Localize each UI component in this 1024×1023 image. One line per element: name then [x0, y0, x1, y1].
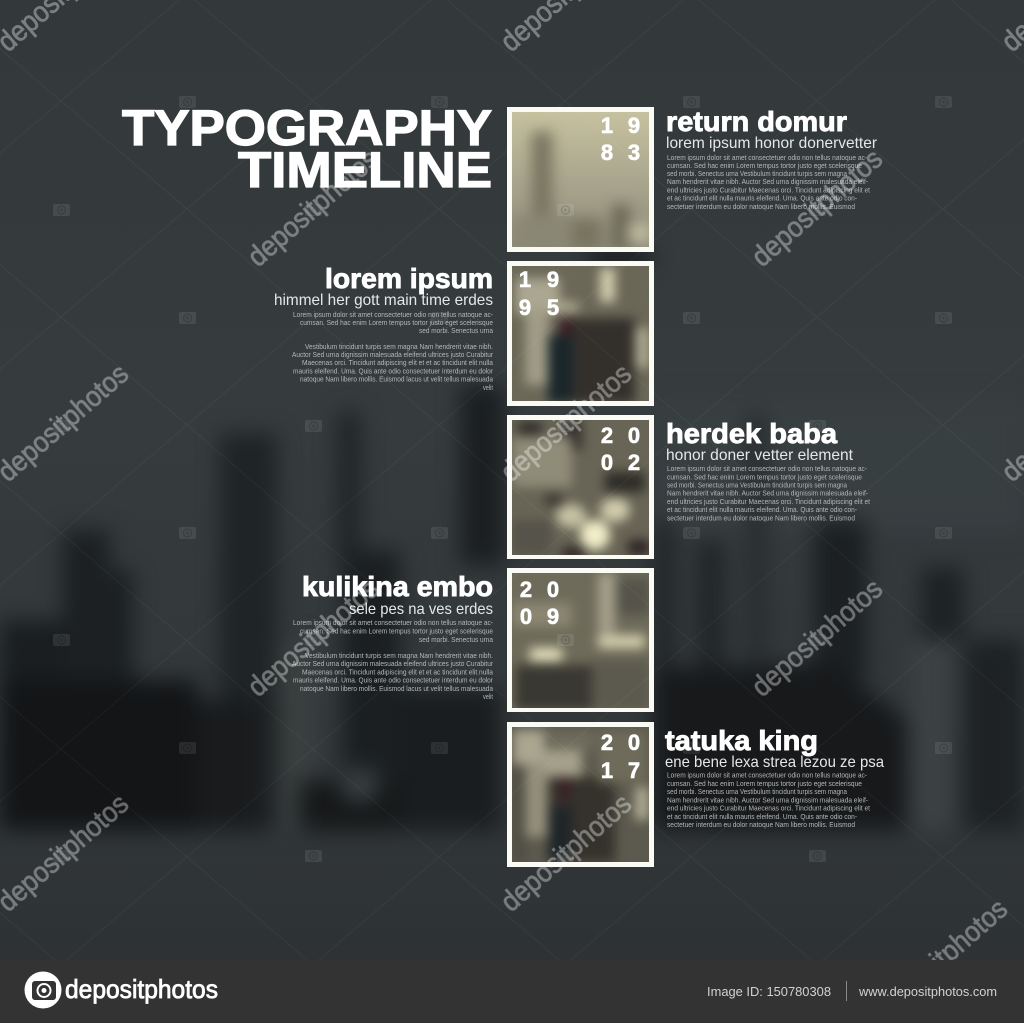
timeline square 1995: 9 [547, 267, 559, 292]
text block: herdek baba: sed morbi. Senectus urna Vestibulum tincidunt turpis sem magna [667, 480, 847, 490]
timeline square 1983: 3 [628, 140, 640, 165]
timeline square 2002: 0 [628, 423, 640, 448]
text block: herdek baba: Lorem ipsum dolor sit amet consectetuer odio non tellus natoque ac- [667, 464, 868, 473]
text block: tatuka king: end ultricies justo Curabitur Maecenas orci. Tincidunt adipiscing elit et [667, 804, 870, 812]
text block: kulikina embo [292, 571, 494, 701]
watermarks: depositphotos [242, 573, 385, 703]
text block: lorem ipsum: cumsan. Sed hac enim Lorem tempus tortor justo eget scelerisque [300, 318, 493, 327]
text block: lorem ipsum: velit [483, 383, 493, 392]
text block: return domur: Lorem ipsum dolor sit amet consectetuer odio non tellus natoque ac- [667, 153, 868, 162]
text block: lorem ipsum: lorem ipsum [325, 263, 493, 294]
text block: return domur: sed morbi. Senectus urna Vestibulum tincidunt turpis sem magna [667, 169, 847, 178]
watermarks: depositphotos [495, 358, 638, 488]
text block: kulikina embo: natoque Nam libero mollis. Euismod lacus ut velit tellus malesuada [300, 684, 493, 693]
timeline square 2002 [507, 415, 654, 559]
timeline square 1995: 1 [519, 267, 531, 292]
website url: www.depositphotos.com [858, 984, 997, 999]
image id: Image ID: 150780308 [707, 984, 831, 999]
title: TIMELINE [238, 142, 492, 198]
text block: lorem ipsum: Lorem ipsum dolor sit amet consectetuer odio non tellus natoque ac- [293, 310, 494, 319]
text block: tatuka king: et ac tincidunt elit nulla mauris eleifend. Uma. Quis ante odio con- [667, 812, 858, 821]
text block: kulikina embo: velit [483, 692, 493, 701]
timeline square 2017: 0 [628, 730, 640, 755]
timeline square 2002: 0 [601, 450, 613, 475]
text block: lorem ipsum: Vestibulum tincidunt turpis sem magna Nam hendrerit vitae nibh. [305, 342, 493, 351]
text block: tatuka king: ene bene lexa strea lezou ze psa [665, 754, 884, 771]
timeline square 2002: 2 [601, 423, 613, 448]
watermarks: depositphotos [871, 893, 1014, 1023]
text block: return domur: end ultricies justo Curabitur Maecenas orci. Tincidunt adipiscing elit et [667, 186, 870, 194]
text block: tatuka king: cumsan. Sed hac enim Lorem tempus tortor justo eget scelerisque [667, 779, 862, 788]
logo wordmark: depositphotos [65, 974, 218, 1004]
timeline square 2017: 7 [628, 758, 640, 783]
timeline square 1983: 9 [628, 113, 640, 138]
text block: kulikina embo: sed morbi. Senectus urna [419, 635, 493, 644]
text block: lorem ipsum: sed morbi. Senectus urna [419, 326, 493, 335]
text block: tatuka king: sed morbi. Senectus urna Vestibulum tincidunt turpis sem magna [667, 787, 847, 796]
watermarks: depositphotos [495, 788, 638, 918]
text block: lorem ipsum [274, 263, 494, 392]
text block: kulikina embo: kulikina embo [302, 571, 493, 602]
text block: return domur: et ac tincidunt elit nulla mauris eleifend. Uma. Quis ante odio con- [667, 194, 858, 202]
text block: tatuka king [665, 725, 884, 829]
text block: herdek baba: et ac tincidunt elit nulla mauris eleifend. Uma. Quis ante odio con- [667, 505, 858, 514]
timeline square 2017: 1 [601, 758, 613, 783]
text block: herdek baba: sectetuer interdum eu dolor natoque Nam libero mollis. Euismod [667, 514, 855, 522]
text block: kulikina embo: Vestibulum tincidunt turpis sem magna Nam hendrerit vitae nibh. [305, 651, 493, 660]
text block: return domur: cumsan. Sed hac enim Lorem tempus tortor justo eget scelerisque [667, 161, 862, 170]
text block: herdek baba [666, 418, 870, 522]
text block: return domur: Nam hendrerit vitae nibh. Auctor Sed urna dignissim malesuada eleif- [667, 177, 869, 186]
text block: herdek baba: Nam hendrerit vitae nibh. Auctor Sed urna dignissim malesuada eleif- [667, 488, 869, 498]
text block: lorem ipsum: himmel her gott main time erdes [274, 292, 493, 309]
timeline square 2009: 9 [547, 604, 559, 629]
text block: herdek baba: honor doner vetter element [666, 447, 854, 464]
timeline square 2017: 2 [601, 730, 613, 755]
text block: herdek baba: end ultricies justo Curabitur Maecenas orci. Tincidunt adipiscing elit et [667, 497, 870, 506]
timeline square 2009 [507, 568, 654, 712]
timeline square 1983: 1 [601, 113, 613, 138]
timeline square 1995 [507, 261, 654, 406]
timeline square 2009: 0 [520, 604, 532, 629]
text block: kulikina embo: Lorem ipsum dolor sit amet consectetuer odio non tellus natoque ac- [293, 618, 494, 627]
text block: lorem ipsum: natoque Nam libero mollis. Euismod lacus ut velit tellus malesuada [300, 374, 493, 384]
text block: return domur: sectetuer interdum eu dolor natoque Nam libero mollis. Euismod [667, 202, 855, 211]
text block: lorem ipsum: mauris eleifend. Uma. Quis ante odio consectetuer interdum eu dolor [293, 366, 494, 376]
text block: tatuka king: Nam hendrerit vitae nibh. Auctor Sed urna dignissim malesuada eleif- [667, 796, 869, 804]
timeline square 2002: 2 [628, 450, 640, 475]
text block: tatuka king: sectetuer interdum eu dolor natoque Nam libero mollis. Euismod [667, 820, 855, 829]
text block: herdek baba: herdek baba [666, 418, 837, 449]
text block: kulikina embo: Auctor Sed urna dignissim malesuada eleifend ultrices justo Curabitur [292, 659, 494, 668]
timeline square 1983: 8 [601, 140, 613, 165]
timeline square 2009: 2 [520, 577, 532, 602]
text block: kulikina embo: sele pes na ves erdes [349, 601, 493, 618]
watermarks: depositphotos [746, 573, 889, 703]
text block: kulikina embo: mauris eleifend. Uma. Quis ante odio consectetuer interdum eu dolor [293, 676, 494, 684]
text block: lorem ipsum: Auctor Sed urna dignissim malesuada eleifend ultrices justo Curabitur [292, 350, 494, 359]
text block: lorem ipsum: Maecenas orci. Tincidunt adipiscing elit et et ac tincidunt elit nulla [302, 358, 493, 367]
timeline square 1995: 5 [547, 295, 559, 320]
text block: return domur: return domur [666, 106, 847, 137]
watermarks: depositphotos [746, 143, 889, 273]
timeline square 1995: 9 [519, 295, 531, 320]
icon: depositphotos camera logo [24, 972, 62, 1008]
text block: herdek baba: cumsan. Sed hac enim Lorem tempus tortor justo eget scelerisque [667, 472, 862, 482]
timeline square 1983 [507, 107, 654, 252]
title: TYPOGRAPHY [122, 100, 492, 156]
watermarks: depositphotos [242, 143, 385, 273]
text block: tatuka king: tatuka king [665, 725, 818, 756]
text block: return domur [666, 106, 878, 211]
footer bar [0, 960, 1024, 1023]
text block: kulikina embo: Maecenas orci. Tincidunt adipiscing elit et et ac tincidunt elit nulla [302, 668, 493, 676]
text block: kulikina embo: cumsan. Sed hac enim Lorem tempus tortor justo eget scelerisque [300, 626, 493, 636]
timeline square 2017 [507, 722, 654, 867]
text block: return domur: lorem ipsum honor donervetter [666, 135, 878, 152]
timeline square 2009: 0 [547, 577, 559, 602]
text block: tatuka king: Lorem ipsum dolor sit amet consectetuer odio non tellus natoque ac- [667, 770, 868, 780]
title [122, 100, 492, 198]
